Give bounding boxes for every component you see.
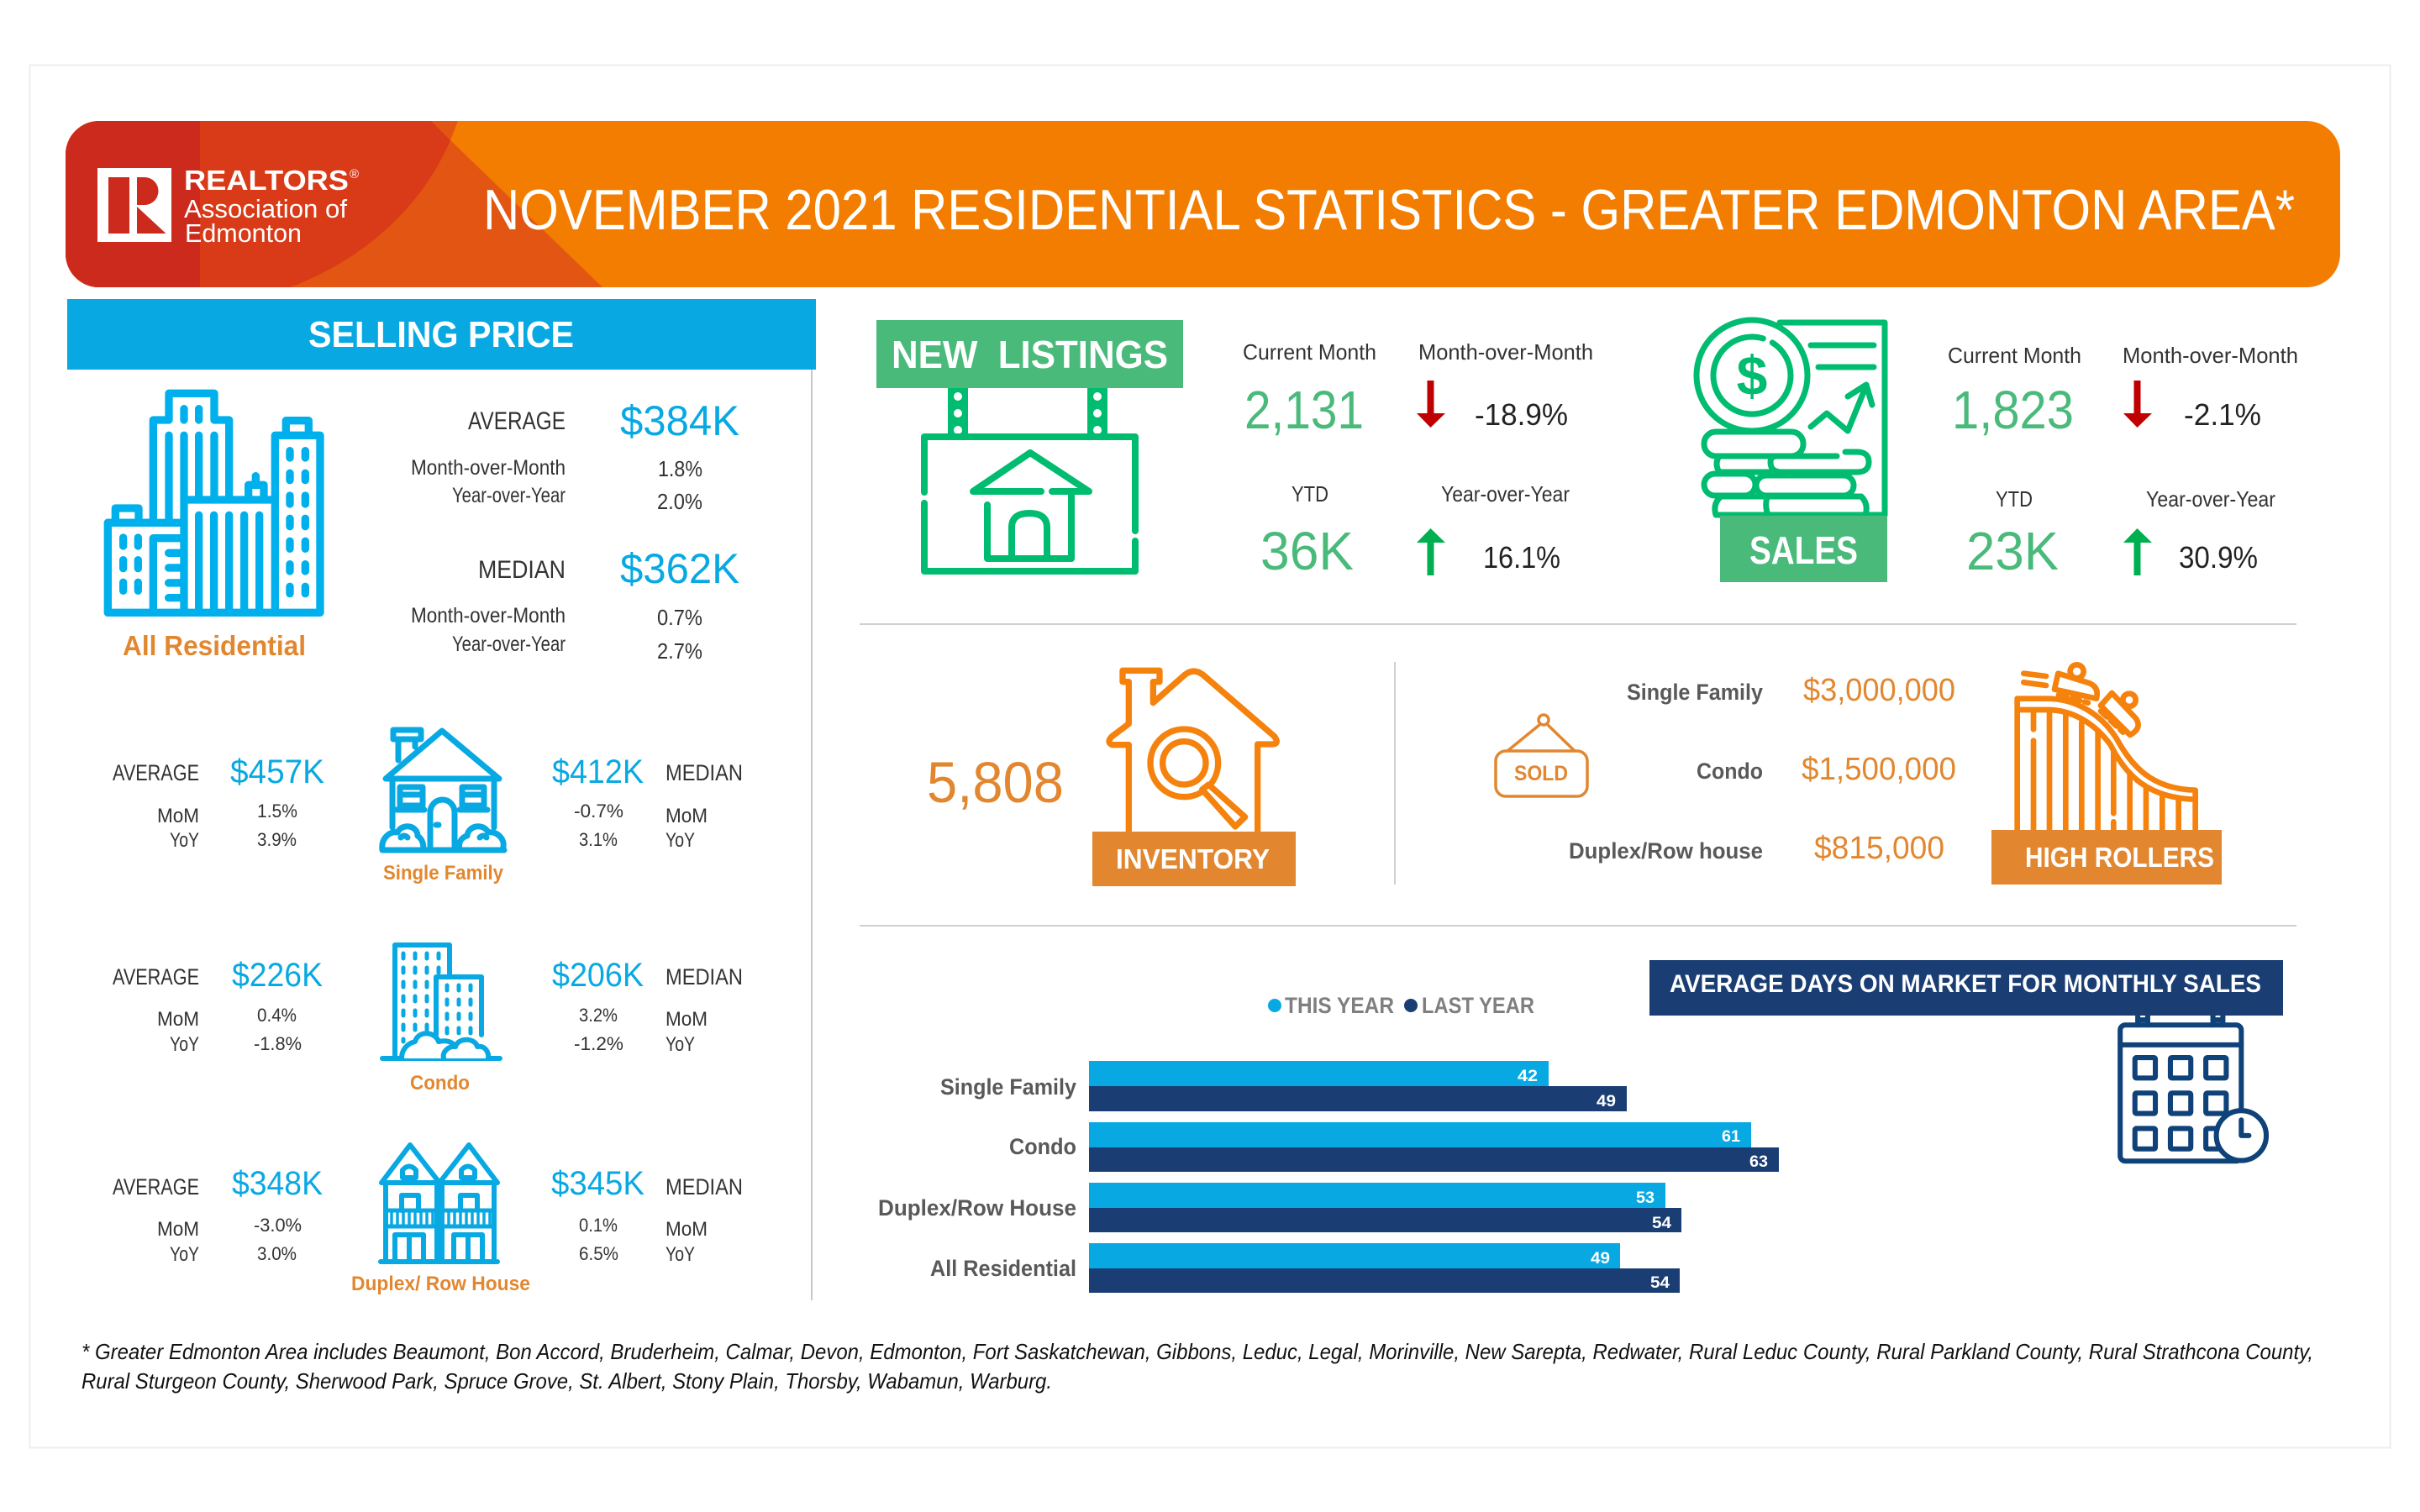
row: condo <box>1009 1122 1779 1172</box>
chart legend: THIS YEAR <box>1285 993 1394 1018</box>
all residential average stats <box>411 397 739 514</box>
arrow: up <box>2123 528 2152 575</box>
duplex average stats: -3.0% <box>254 1215 302 1236</box>
all residential average stats: Year-over-Year <box>452 484 566 507</box>
inventory heading <box>1092 832 1296 886</box>
single family median stats <box>552 753 743 852</box>
row: condo: Condo <box>1009 1134 1076 1159</box>
high roller single family: $3,000,000 <box>1803 673 1955 708</box>
inventory heading: INVENTORY <box>1116 843 1270 874</box>
sales ytd: 23K <box>1966 521 2059 581</box>
logo: realtors association: Edmonton <box>185 218 302 248</box>
arrow: up <box>1417 528 1445 575</box>
duplex median stats <box>551 1165 743 1266</box>
new listings year over year: 16.1% <box>1483 540 1560 575</box>
row: duplex row house <box>878 1183 1681 1232</box>
all residential median stats: Month-over-Month <box>411 604 566 627</box>
single family median stats: 3.1% <box>579 829 618 850</box>
logo: realtors association <box>97 165 359 248</box>
header banner <box>66 121 2340 287</box>
sales year over year: Year-over-Year <box>2146 486 2275 512</box>
high roller condo <box>1697 752 1956 787</box>
bar chart <box>878 1061 1779 1293</box>
all residential median stats: 2.7% <box>657 638 702 664</box>
row: all residential: All Residential <box>930 1256 1076 1281</box>
arrow: down <box>2123 381 2152 428</box>
icon: calendar with clock <box>2120 1015 2266 1161</box>
icon: sold sign: SOLD <box>1514 762 1568 785</box>
footnote: Rural Sturgeon County, Sherwood Park, Spruce Grove, St. Albert, Stony Plain, Thorsby, Wabamun, Warburg. <box>82 1368 1052 1394</box>
icon: sold sign <box>1496 715 1587 796</box>
row: single family: Single Family <box>940 1074 1076 1100</box>
icon: house with magnifier <box>1109 670 1276 832</box>
row: condo: 63 <box>1749 1153 1768 1171</box>
high rollers heading: HIGH ROLLERS <box>2025 842 2214 873</box>
condo median stats: 3.2% <box>579 1005 618 1026</box>
row: single family: 42 <box>1518 1068 1538 1085</box>
sales year over year: 30.9% <box>2179 540 2258 575</box>
sales current month: Current Month <box>1948 343 2081 368</box>
new listings heading: NEW LISTINGS <box>892 333 1168 376</box>
high roller duplex <box>1569 831 1944 866</box>
duplex average stats: MoM <box>157 1218 199 1241</box>
sales month over month <box>2123 343 2298 432</box>
panel: average days on market <box>878 960 2283 1293</box>
duplex median stats: $345K <box>551 1165 644 1202</box>
single family average stats: 3.9% <box>257 829 297 850</box>
high roller single family <box>1627 673 1955 708</box>
condo average stats: -1.8% <box>254 1033 302 1054</box>
new listings ytd: 36K <box>1260 521 1354 581</box>
row: all residential <box>930 1243 1680 1293</box>
high roller duplex: Duplex/Row house <box>1569 838 1763 864</box>
all residential median stats: $362K <box>620 545 739 592</box>
icon: hanging house sign <box>924 388 1135 571</box>
high rollers heading <box>1991 830 2222 885</box>
icon: condo towers <box>382 945 500 1058</box>
new listings month over month <box>1417 339 1593 432</box>
duplex median stats: 6.5% <box>579 1243 618 1264</box>
sales ytd <box>1966 486 2059 581</box>
all residential average stats: AVERAGE <box>468 407 566 435</box>
single family median stats: -0.7% <box>574 801 623 822</box>
row: all residential: 49 <box>1591 1250 1610 1268</box>
inventory value: 5,808 <box>927 750 1064 815</box>
single family average stats: $457K <box>230 753 324 790</box>
new listings month over month: -18.9% <box>1475 397 1568 432</box>
high roller single family: Single Family <box>1627 680 1763 705</box>
all residential median stats: Year-over-Year <box>452 633 566 656</box>
sales month over month: Month-over-Month <box>2123 343 2298 368</box>
duplex average stats <box>113 1165 323 1266</box>
new listings ytd <box>1260 481 1354 581</box>
single family median stats: MEDIAN <box>666 760 743 785</box>
panel: high rollers <box>1496 664 2222 885</box>
panel: inventory <box>927 670 1296 886</box>
single family average stats: 1.5% <box>257 801 297 822</box>
logo: realtors association: REALTORS <box>184 165 349 196</box>
panel: new listings <box>876 320 1593 581</box>
arrow: down <box>1417 381 1445 428</box>
new listings heading <box>876 320 1183 388</box>
new listings current month <box>1243 339 1376 440</box>
condo label: Condo <box>410 1072 470 1095</box>
duplex average stats: 3.0% <box>257 1243 297 1264</box>
sales ytd: YTD <box>1996 486 2033 512</box>
duplex median stats: YoY <box>666 1243 695 1266</box>
new listings year over year <box>1417 481 1570 575</box>
sales heading <box>1720 516 1887 582</box>
selling price heading <box>67 299 816 370</box>
new listings ytd: YTD <box>1292 481 1328 507</box>
high roller duplex: $815,000 <box>1814 831 1944 866</box>
all residential average stats: Month-over-Month <box>411 456 566 480</box>
icon: coins and report: $ <box>1737 344 1767 407</box>
row: single family <box>940 1061 1627 1111</box>
single family label: Single Family <box>383 862 504 885</box>
single family average stats: AVERAGE <box>113 760 199 785</box>
panel: selling price <box>67 299 816 1300</box>
all residential average stats: 1.8% <box>658 456 702 481</box>
logo: realtors association: Association of <box>184 194 347 223</box>
icon: single family house <box>382 730 504 850</box>
single family median stats: YoY <box>666 829 695 852</box>
high roller condo: Condo <box>1697 759 1763 784</box>
all residential median stats: 0.7% <box>657 605 702 630</box>
sales year over year <box>2123 486 2275 575</box>
sales heading: SALES <box>1749 528 1858 572</box>
icon: coins and report <box>1697 320 1885 515</box>
duplex median stats: MEDIAN <box>666 1174 743 1200</box>
condo median stats: $206K <box>552 957 644 994</box>
chart legend: LAST YEAR <box>1422 993 1534 1018</box>
icon: roller coaster <box>2018 664 2196 830</box>
sales current month <box>1948 343 2081 440</box>
all residential median stats <box>411 545 739 664</box>
single family average stats: MoM <box>157 805 199 827</box>
condo average stats <box>113 957 323 1056</box>
icon: duplex row house <box>381 1145 497 1262</box>
chart legend <box>1268 993 1534 1018</box>
row: single family: 49 <box>1597 1093 1616 1110</box>
condo average stats: 0.4% <box>257 1005 297 1026</box>
all residential median stats: MEDIAN <box>478 556 566 584</box>
condo average stats: YoY <box>170 1033 199 1056</box>
condo median stats: YoY <box>666 1033 695 1056</box>
new listings current month: 2,131 <box>1244 380 1364 440</box>
new listings current month: Current Month <box>1243 339 1376 365</box>
logo: realtors association: ® <box>350 167 359 181</box>
high roller condo: $1,500,000 <box>1802 752 1956 787</box>
duplex median stats: MoM <box>666 1218 708 1241</box>
row: duplex row house: Duplex/Row House <box>878 1195 1076 1221</box>
row: duplex row house: 54 <box>1652 1215 1671 1232</box>
icon: city buildings <box>108 393 320 612</box>
footnote <box>82 1339 2313 1394</box>
all residential average stats: 2.0% <box>657 489 702 514</box>
condo average stats: $226K <box>232 957 323 994</box>
duplex label: Duplex/ Row House <box>351 1273 530 1295</box>
condo median stats: -1.2% <box>574 1033 623 1054</box>
row: condo: 61 <box>1722 1128 1740 1146</box>
panel: sales <box>1697 320 2298 582</box>
condo average stats: MoM <box>157 1008 199 1031</box>
single family median stats: $412K <box>552 753 644 790</box>
new listings month over month: Month-over-Month <box>1418 339 1593 365</box>
sales month over month: -2.1% <box>2184 397 2261 432</box>
condo median stats: MEDIAN <box>666 964 743 990</box>
duplex average stats: $348K <box>232 1165 323 1202</box>
selling price heading: SELLING PRICE <box>308 314 574 355</box>
single family median stats: MoM <box>666 805 708 827</box>
row: duplex row house: 53 <box>1636 1189 1655 1207</box>
single family average stats: YoY <box>170 829 199 852</box>
all residential average stats: $384K <box>620 397 739 444</box>
duplex median stats: 0.1% <box>579 1215 618 1236</box>
condo median stats: MoM <box>666 1008 708 1031</box>
condo median stats <box>552 957 743 1056</box>
days on market heading: AVERAGE DAYS ON MARKET FOR MONTHLY SALES <box>1670 970 2261 998</box>
condo average stats: AVERAGE <box>113 964 199 990</box>
all residential label: All Residential <box>123 630 306 661</box>
duplex average stats: AVERAGE <box>113 1174 199 1200</box>
days on market heading <box>1649 960 2283 1016</box>
sales current month: 1,823 <box>1952 380 2074 440</box>
row: all residential: 54 <box>1650 1274 1670 1292</box>
duplex average stats: YoY <box>170 1243 199 1266</box>
single family average stats <box>113 753 324 852</box>
new listings year over year: Year-over-Year <box>1441 481 1570 507</box>
